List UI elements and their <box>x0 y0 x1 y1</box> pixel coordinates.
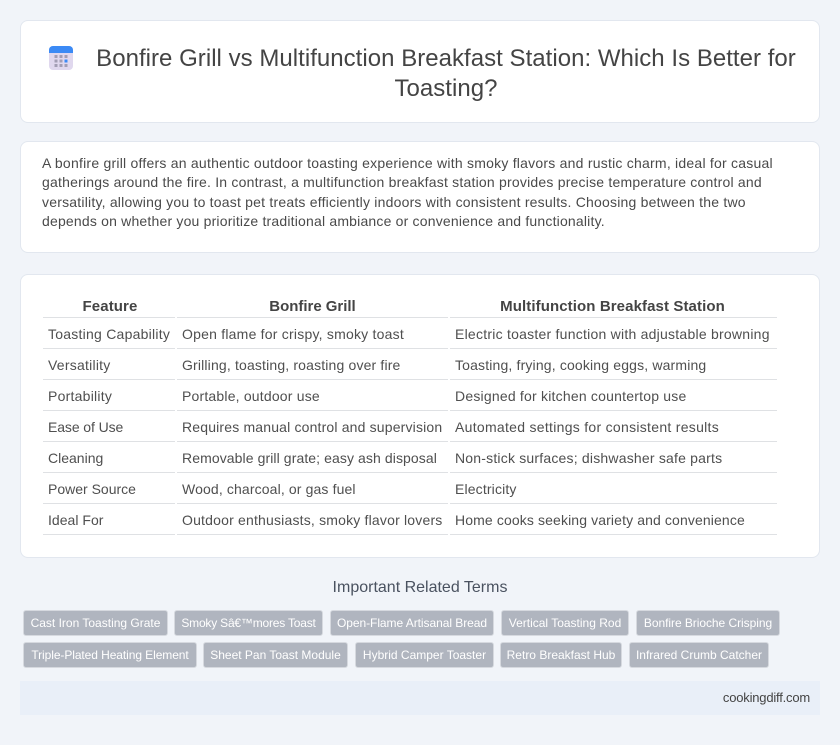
table row: versatility <box>48 357 706 373</box>
table row: cleaning <box>48 450 722 466</box>
tag: Cast Iron Toasting Grate <box>31 616 160 630</box>
table: column headers <box>83 298 725 315</box>
table row: ease of use: Requires manual control and supervision <box>182 419 442 435</box>
table row: toasting capability: Electric toaster function with adjustable browning <box>455 326 770 342</box>
footer bar <box>20 681 820 715</box>
table row: ideal for: Home cooks seeking variety and convenience <box>455 512 745 528</box>
table row: versatility: Versatility <box>48 357 111 373</box>
tag <box>330 610 494 636</box>
table row: ease of use: Ease of Use <box>48 419 123 435</box>
tag <box>501 610 629 636</box>
tag: Vertical Toasting Rod <box>509 616 621 630</box>
table row: portability: Portable, outdoor use <box>182 388 320 404</box>
tag: Retro Breakfast Hub <box>507 648 615 662</box>
tag <box>23 610 168 636</box>
table row: toasting capability <box>48 326 770 342</box>
table row: cleaning: Non-stick surfaces; dishwasher safe parts <box>455 450 722 466</box>
tag <box>355 642 494 668</box>
text block: introduction <box>42 155 773 229</box>
text block: introduction: gatherings around the fire. In contrast, a multifunction breakfast station provides precise temperature control and <box>42 174 762 190</box>
table row: cleaning: Removable grill grate; easy ash disposal <box>182 450 437 466</box>
tag <box>174 610 323 636</box>
tag: Triple-Plated Heating Element <box>31 648 189 662</box>
tag list: related terms <box>23 610 780 668</box>
table row: ease of use: Automated settings for consistent results <box>455 419 719 435</box>
table row: ideal for: Ideal For <box>48 512 103 528</box>
table row: power source: Wood, charcoal, or gas fuel <box>182 481 356 497</box>
text block: introduction: A bonfire grill offers an authentic outdoor toasting experience with smoky flavors and rustic charm, ideal for casual <box>42 155 773 171</box>
panel: comparison table <box>20 274 820 558</box>
table row: portability: Portability <box>48 388 112 404</box>
text block: introduction: versatility, allowing you to toast pet treats efficiently indoors with consistent results. Choosing between the two <box>42 194 746 210</box>
footer text: cookingdiff.com <box>723 690 810 705</box>
title: Toasting? <box>394 75 498 102</box>
text block: introduction: depends on whether you prioritize traditional ambiance or convenience and functionality. <box>42 213 605 229</box>
table: column headers: Feature <box>83 298 137 315</box>
tag: Infrared Crumb Catcher <box>636 648 762 662</box>
table row: power source: Power Source <box>48 481 136 497</box>
panel: header <box>20 20 820 123</box>
table row: power source <box>48 481 517 497</box>
title <box>96 45 796 102</box>
tag: Sheet Pan Toast Module <box>210 648 341 662</box>
tag: Hybrid Camper Toaster <box>363 648 486 662</box>
table row: ease of use <box>48 419 719 435</box>
tag <box>203 642 348 668</box>
tag <box>629 642 769 668</box>
table row: versatility: Grilling, toasting, roasting over fire <box>182 357 401 373</box>
tag <box>500 642 622 668</box>
panel: introduction <box>20 141 820 253</box>
table: column headers: Bonfire Grill <box>269 298 356 315</box>
table row: ideal for: Outdoor enthusiasts, smoky flavor lovers <box>182 512 442 528</box>
title: Bonfire Grill vs Multifunction Breakfast Station: Which Is Better for <box>96 45 796 72</box>
table row: power source: Electricity <box>455 481 517 497</box>
icon: calendar <box>49 46 73 70</box>
tag <box>636 610 780 636</box>
table row: ideal for <box>48 512 745 528</box>
table row: portability: Designed for kitchen countertop use <box>455 388 686 404</box>
tag: Smoky Sâ€™mores Toast <box>181 616 316 630</box>
tag <box>23 642 197 668</box>
tag: Bonfire Brioche Crisping <box>644 616 772 630</box>
table row: portability <box>48 388 686 404</box>
table: column headers: Multifunction Breakfast Station <box>500 298 725 315</box>
table row: toasting capability: Open flame for crispy, smoky toast <box>182 326 404 342</box>
table row: toasting capability: Toasting Capability <box>48 326 170 342</box>
table row: versatility: Toasting, frying, cooking eggs, warming <box>455 357 706 373</box>
tag: Open-Flame Artisanal Bread <box>337 616 487 630</box>
heading: related terms: Important Related Terms <box>333 579 507 596</box>
table row: cleaning: Cleaning <box>48 450 103 466</box>
